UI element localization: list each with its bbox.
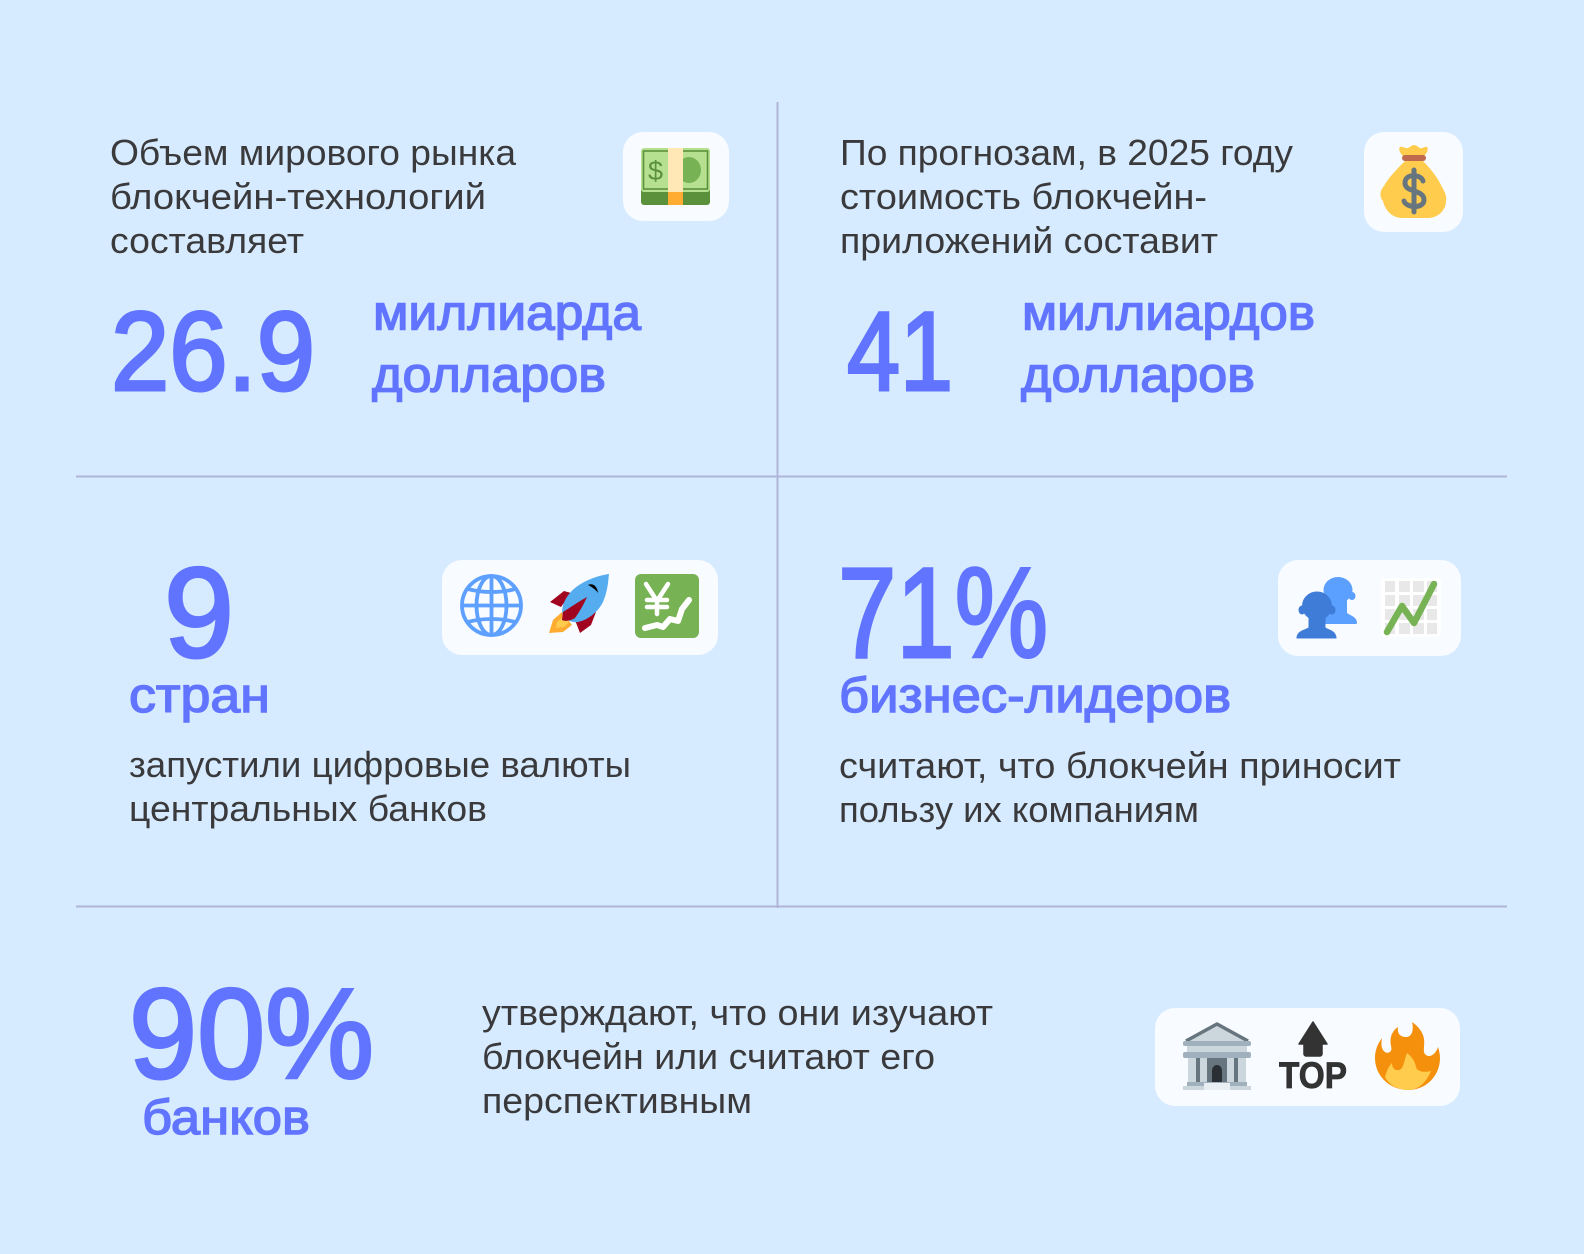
text: forecast description: приложений составит — [840, 220, 1218, 261]
text: countries description — [129, 744, 631, 829]
unit: banks: банков — [142, 1091, 310, 1145]
icons: people, chart — [1278, 560, 1461, 656]
text: countries description: запустили цифровые валюты — [129, 744, 631, 785]
text: leaders description — [839, 745, 1401, 830]
unit: billion dollars: долларов — [1021, 348, 1255, 402]
number: 41: 41 — [847, 289, 953, 414]
unit: countries: стран — [129, 669, 270, 723]
text: market description — [110, 132, 517, 261]
number: 9: 9 — [164, 542, 234, 685]
text: leaders description: считают, что блокчейн приносит — [839, 745, 1401, 786]
icon: TOP arrow — [1279, 1022, 1347, 1096]
unit: billion dollars: миллиарда — [373, 286, 642, 340]
text: countries description: центральных банков — [129, 788, 487, 829]
icon: globe — [462, 576, 521, 635]
text: banks description — [482, 992, 993, 1121]
number: 71%: 71% — [838, 542, 1048, 685]
unit: billion dollars: миллиардов — [1022, 286, 1315, 340]
icon: people — [1297, 577, 1357, 638]
panel: business leaders — [838, 542, 1461, 830]
icon: rocket — [549, 574, 609, 633]
unit: billion dollars: долларов — [372, 348, 606, 402]
icons: globe, rocket, yen chart — [442, 560, 718, 655]
text: forecast description: По прогнозам, в 2025 году — [840, 132, 1293, 173]
text: banks description: блокчейн или считают его — [482, 1036, 935, 1077]
icon: money bag — [1364, 132, 1463, 232]
text: market description: составляет — [110, 220, 304, 261]
text: market description: блокчейн-технологий — [110, 176, 486, 217]
number: 90%: 90% — [129, 963, 374, 1106]
panel: banks — [129, 963, 1460, 1145]
icon: bank — [1183, 1024, 1251, 1090]
icon: growth chart — [1381, 578, 1441, 637]
unit: business leaders: бизнес-лидеров — [839, 669, 1231, 723]
icon: yen chart — [635, 574, 699, 638]
text: leaders description: пользу их компаниям — [839, 789, 1199, 830]
panel: forecast 2025 — [840, 132, 1463, 414]
unit: billion dollars — [372, 286, 642, 402]
text: market description: Объем мирового рынка — [110, 132, 517, 173]
text: forecast description: стоимость блокчейн- — [840, 176, 1207, 217]
icon: fire — [1375, 1022, 1440, 1090]
number: 26.9: 26.9 — [111, 289, 315, 414]
icon: banknotes — [623, 132, 729, 221]
panel: nine countries — [129, 542, 718, 829]
unit: billion dollars — [1021, 286, 1315, 402]
icon: banknotes: $ — [648, 156, 663, 186]
icons: bank, top, fire — [1155, 1008, 1460, 1106]
panel: global market — [110, 132, 729, 414]
text: forecast description — [840, 132, 1293, 261]
icon: TOP arrow: TOP — [1279, 1055, 1347, 1096]
text: banks description: утверждают, что они изучают — [482, 992, 993, 1033]
text: banks description: перспективным — [482, 1080, 752, 1121]
